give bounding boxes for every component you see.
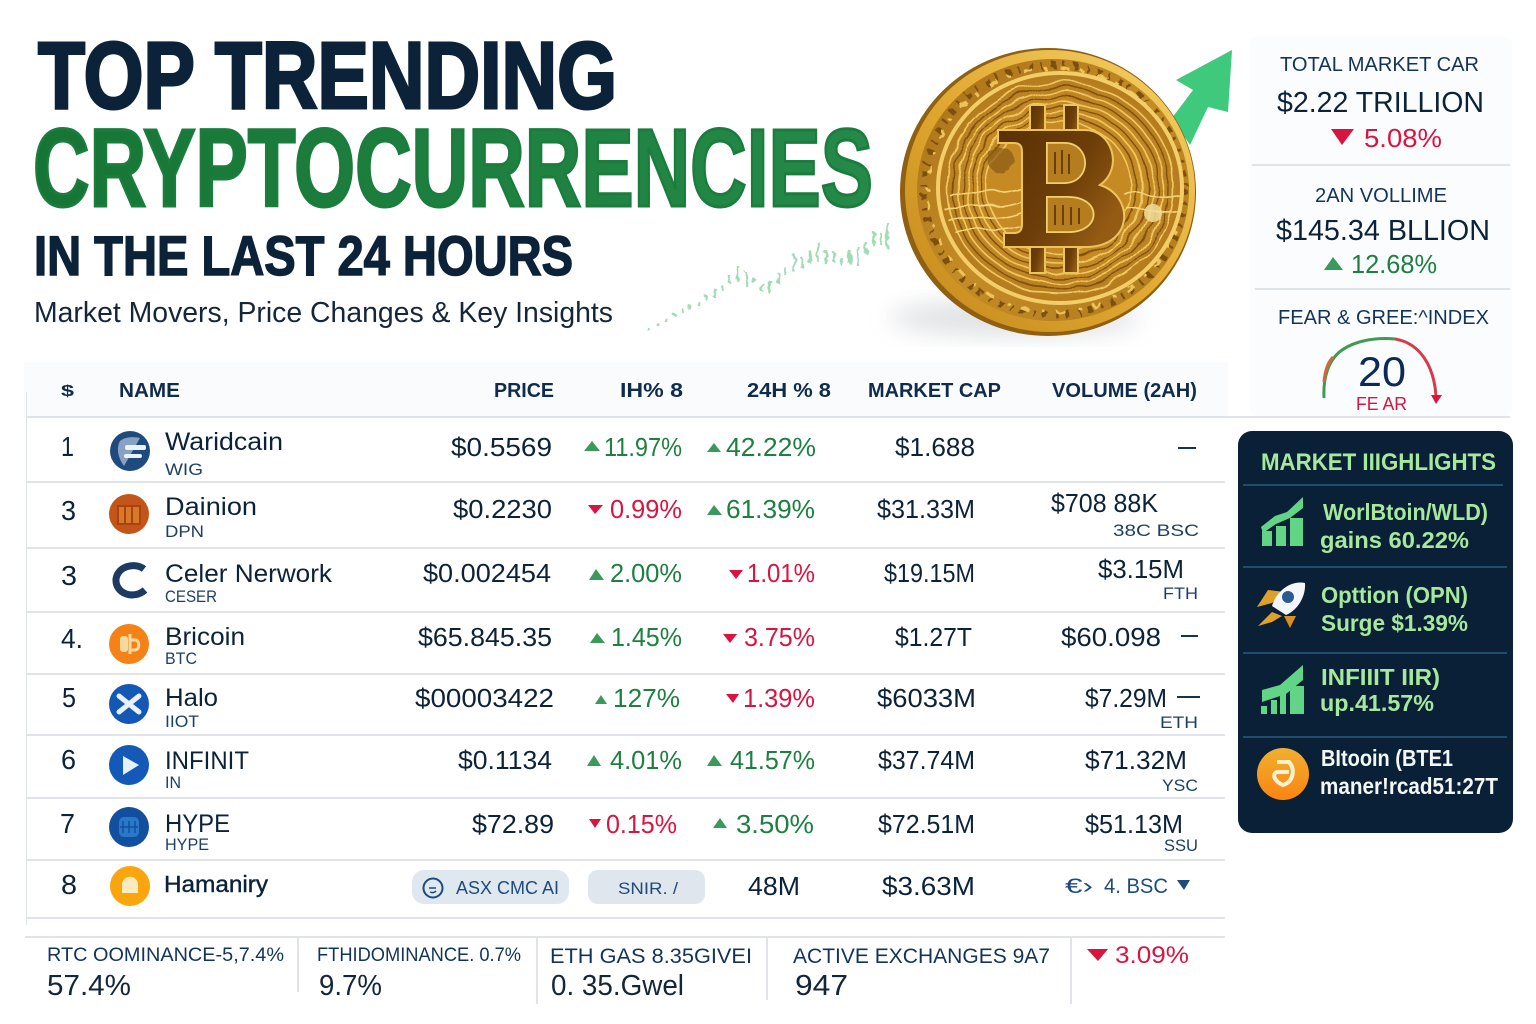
icon: orange coin <box>1257 748 1309 800</box>
row 6: INFINIT <box>61 744 1198 795</box>
active exchanges: 947 <box>795 970 848 1002</box>
row 7: HYPE: SSU <box>1164 836 1198 855</box>
row 7: HYPE: 3.50% <box>736 809 814 839</box>
row 4: Bitcoin <box>61 622 1198 668</box>
BTC dominance: RTC OOMINANCE-5,7.4% <box>47 945 284 966</box>
highlight: WLD <box>1261 497 1488 553</box>
row 5: Halo: 5 <box>62 682 76 713</box>
table header: PRICE <box>494 380 554 402</box>
total market cap stat: TOTAL MARKET CAR <box>1280 54 1479 76</box>
row 5: Halo: 1.39% <box>743 683 815 713</box>
button: blurred pill <box>588 870 705 904</box>
panel: bottom stats strip <box>25 937 1225 1004</box>
highlight: OPN: Opttion (OPN) <box>1321 582 1468 608</box>
title: IN THE LAST 24 HOURS <box>34 224 573 287</box>
table header: 24H % 8 <box>747 380 831 402</box>
icon: INFINIT <box>109 745 149 785</box>
icon: Celer C <box>116 566 145 595</box>
row 3: Celer Network: $19.15M <box>884 558 975 588</box>
highlight: Bitcoin <box>1257 745 1498 800</box>
row 6: INFINIT: 6 <box>61 744 76 775</box>
row 2: Dainion: 3 <box>61 495 76 526</box>
button: blurred pill: SNIR. / <box>618 879 678 898</box>
row 4: Bitcoin: 1.45% <box>611 622 682 652</box>
row 3: Celer Network: Celer Nerwork <box>165 560 333 588</box>
icon: rocket <box>1257 583 1305 628</box>
icon: gold bitcoin coin <box>890 48 1196 336</box>
highlight: WLD: WorlBtoin/WLD) <box>1323 499 1488 525</box>
fear and greed index: 20 <box>1358 348 1406 395</box>
table header: $ <box>61 383 74 400</box>
icon: Hamaniry <box>110 866 150 906</box>
fear and greed index: FEAR & GREE:^INDEX <box>1278 307 1489 329</box>
icon: green up arrow <box>1172 50 1232 145</box>
BTC dominance <box>47 945 284 1002</box>
ETH dominance <box>317 945 521 1002</box>
row 2: Dainion <box>61 488 1199 541</box>
row 3: Celer Network: $0.002454 <box>423 558 551 588</box>
row 7: HYPE: 0.15% <box>606 809 677 839</box>
highlight: OPN <box>1257 582 1468 636</box>
24h volume stat: 12.68% <box>1351 249 1437 279</box>
row 5: Halo: 127% <box>613 683 680 713</box>
panel: market stats <box>1250 36 1512 416</box>
highlight: WLD: gains 60.22% <box>1320 527 1469 553</box>
24h volume stat <box>1276 185 1490 279</box>
row 3: Celer Network: 3 <box>61 560 77 591</box>
row 6: INFINIT: $0.1134 <box>458 745 552 775</box>
row 4: Bitcoin: $1.27T <box>895 622 972 652</box>
row 4: Bitcoin: Bricoin <box>165 623 245 651</box>
row 2: Dainion: $708 88K <box>1051 488 1159 518</box>
row 3: Celer Network: CESER <box>165 587 217 606</box>
row 2: Dainion: DPN <box>165 522 204 541</box>
row 5: Halo: $6033M <box>877 683 976 713</box>
ETH gas: 0. 35.Gwel <box>551 970 684 1002</box>
row 5: Halo: $00003422 <box>415 683 554 713</box>
ETH gas: ETH GAS 8.35GIVEI <box>550 945 752 968</box>
icon: Dainion <box>109 494 149 534</box>
row 7: HYPE <box>60 807 1198 855</box>
fear and greed index <box>1278 307 1489 414</box>
panel: coin table <box>24 362 1510 925</box>
row 7: HYPE: $51.13M <box>1085 809 1183 839</box>
row 3: Celer Network: 1.01% <box>747 558 815 588</box>
active exchanges <box>793 945 1050 1002</box>
button: ask CMC AI <box>412 870 569 904</box>
row 1: Waridcain: 1 <box>61 431 74 462</box>
BTC dominance: 57.4% <box>47 970 131 1002</box>
row 6: INFINIT: $71.32M <box>1085 745 1187 775</box>
row 2: Dainion: 0.99% <box>610 494 682 524</box>
icon: Waridcain <box>110 431 150 471</box>
panel: market highlights <box>1238 431 1513 833</box>
row 1: Waridcain: 42.22% <box>726 432 816 462</box>
table header <box>61 380 1197 402</box>
icon: Halo <box>109 684 149 724</box>
row 6: INFINIT: INFINIT <box>165 747 249 775</box>
highlight: Bitcoin: BItooin (BTE1 <box>1321 745 1453 771</box>
row 1: Waridcain: $0.5569 <box>451 432 552 462</box>
row 6: INFINIT: YSC <box>1162 776 1198 795</box>
row 6: INFINIT: 41.57% <box>730 745 815 775</box>
row 7: HYPE: 7 <box>60 808 75 839</box>
title: CRYPTOCURRENCIES <box>33 107 873 230</box>
row 8: Hamaniry: 8 <box>61 869 77 900</box>
row 8: Hamaniry: Hamaniry <box>164 871 269 897</box>
row 4: Bitcoin: BTC <box>165 649 197 668</box>
icon: green bars chart <box>1261 665 1304 714</box>
icon: Bitcoin orange <box>109 624 149 664</box>
row 6: INFINIT: 4.01% <box>610 745 682 775</box>
row 5: Halo: ETH <box>1160 713 1198 732</box>
table header: VOLUME (2AH) <box>1052 380 1197 402</box>
row 7: HYPE: $72.89 <box>472 809 554 839</box>
row 8: Hamaniry: 4. BSC <box>1104 875 1168 898</box>
row 3: Celer Network: 2.00% <box>610 558 682 588</box>
ETH gas <box>550 945 752 1002</box>
icon: HYPE <box>109 807 149 847</box>
bitcoin symbol body <box>998 130 1124 247</box>
row 1: Waridcain: 11.97% <box>604 432 682 462</box>
highlight: Bitcoin: maner!rcad51:27T <box>1320 773 1498 799</box>
icon: green bars and trend <box>1261 497 1303 546</box>
heading: market highlights: MARKET IIIGHLIGHTS <box>1261 449 1496 476</box>
highlight: INFINIT: up.41.57% <box>1320 690 1434 716</box>
row 5: Halo: Halo <box>165 684 218 712</box>
table header: NAME <box>119 380 180 402</box>
row 1: Waridcain: Waridcain <box>165 428 283 456</box>
active exchanges: ACTIVE EXCHANGES 9A7 <box>793 945 1050 968</box>
swirling engraved rings <box>945 82 1180 294</box>
row 8: Hamaniry <box>61 866 1190 906</box>
row 1: Waridcain: $1.688 <box>895 432 975 462</box>
row 8: Hamaniry: €› <box>1065 875 1093 898</box>
24h volume stat: 2AN VOLLIME <box>1315 185 1447 207</box>
ETH dominance: 9.7% <box>319 970 382 1002</box>
table header: IH% 8 <box>620 380 683 402</box>
table header: MARKET CAP <box>868 380 1001 402</box>
row 2: Dainion: $31.33M <box>877 494 975 524</box>
row 2: Dainion: $0.2230 <box>453 494 552 524</box>
button: ask CMC AI: ASX CMC AI <box>456 878 559 898</box>
title: TOP TRENDING <box>38 23 617 129</box>
row 6: INFINIT: $37.74M <box>878 745 975 775</box>
row 2: Dainion: 61.39% <box>726 494 815 524</box>
row 4: Bitcoin: 4. <box>61 623 83 654</box>
ETH dominance: FTHIDOMINANCE. 0.7% <box>317 945 521 966</box>
total market cap stat <box>1277 54 1484 153</box>
total market cap stat: 5.08% <box>1364 123 1442 153</box>
row 4: Bitcoin: 3.75% <box>744 622 815 652</box>
row 3: Celer Network: $3.15M <box>1098 554 1184 584</box>
title <box>33 23 873 287</box>
row 4: Bitcoin: $60.098 <box>1061 622 1161 652</box>
row 3: Celer Network: FTH <box>1163 584 1198 603</box>
raised ticks on the band <box>924 65 1184 315</box>
row 8: Hamaniry: 48M <box>748 871 800 901</box>
row 7: HYPE: HYPE <box>165 810 230 838</box>
highlight: OPN: Surge $1.39% <box>1321 610 1468 636</box>
faint rising green sparkline <box>650 222 887 332</box>
subtitle: Market Movers, Price Changes & Key Insights <box>34 297 613 329</box>
row 3: Celer Network <box>61 554 1198 606</box>
market change: 3.09% <box>1115 942 1189 969</box>
fear and greed index: FE AR <box>1356 394 1407 414</box>
row 2: Dainion: 38C BSC <box>1113 521 1199 540</box>
highlight: INFINIT: INFIIIT IIR) <box>1321 664 1440 690</box>
row 6: INFINIT: IN <box>165 773 181 792</box>
row 1: Waridcain <box>61 428 1196 479</box>
total market cap stat: $2.22 TRILLION <box>1277 87 1484 119</box>
market change <box>1087 942 1189 969</box>
row 4: Bitcoin: $65.845.35 <box>418 622 552 652</box>
row 8: Hamaniry: $3.63M <box>882 871 975 901</box>
row 5: Halo: IIOT <box>165 712 199 731</box>
row 2: Dainion: Dainion <box>165 493 257 521</box>
row 5: Halo <box>62 682 1200 732</box>
row 5: Halo: $7.29M <box>1085 683 1167 713</box>
row 1: Waridcain: WIG <box>165 460 203 479</box>
row 7: HYPE: $72.51M <box>878 809 975 839</box>
24h volume stat: $145.34 BLLION <box>1276 215 1490 247</box>
highlight: INFINIT <box>1261 664 1440 716</box>
row 7: HYPE: HYPE <box>165 835 209 854</box>
